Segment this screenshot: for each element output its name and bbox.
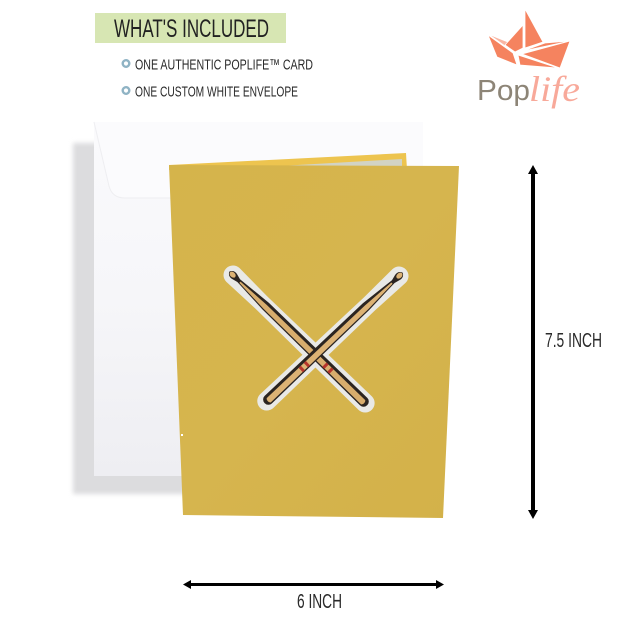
logo: poplife — [477, 9, 580, 109]
logo wordmark: Pop — [477, 75, 530, 107]
heading: what's included: WHAT'S INCLUDED — [114, 15, 269, 43]
stick one — [226, 268, 371, 409]
stick two — [261, 269, 406, 407]
list of included items — [123, 56, 313, 100]
logo wordmark: life — [529, 69, 580, 109]
drumsticks illustration — [220, 262, 412, 416]
card front — [169, 165, 459, 518]
logo wordmark — [477, 69, 580, 109]
item: envelope: ONE CUSTOM WHITE ENVELOPE — [135, 84, 298, 100]
label: 6 inch: 6 INCH — [297, 591, 342, 613]
card back panel — [169, 153, 407, 170]
arrow: width — [183, 580, 444, 589]
bullet: card item — [123, 60, 129, 67]
origami boat icon — [488, 9, 570, 68]
item: card: ONE AUTHENTIC POPLIFE™ CARD — [135, 56, 313, 74]
arrow: height — [528, 165, 538, 519]
sticker outline — [220, 262, 412, 416]
small white speck — [181, 434, 183, 436]
greeting card — [169, 153, 459, 518]
card interior strip — [280, 159, 402, 167]
envelope shadow — [73, 143, 188, 494]
envelope — [94, 122, 423, 476]
heading: what's included — [95, 13, 286, 43]
bullet: envelope item — [123, 87, 129, 94]
envelope flap — [94, 122, 423, 198]
